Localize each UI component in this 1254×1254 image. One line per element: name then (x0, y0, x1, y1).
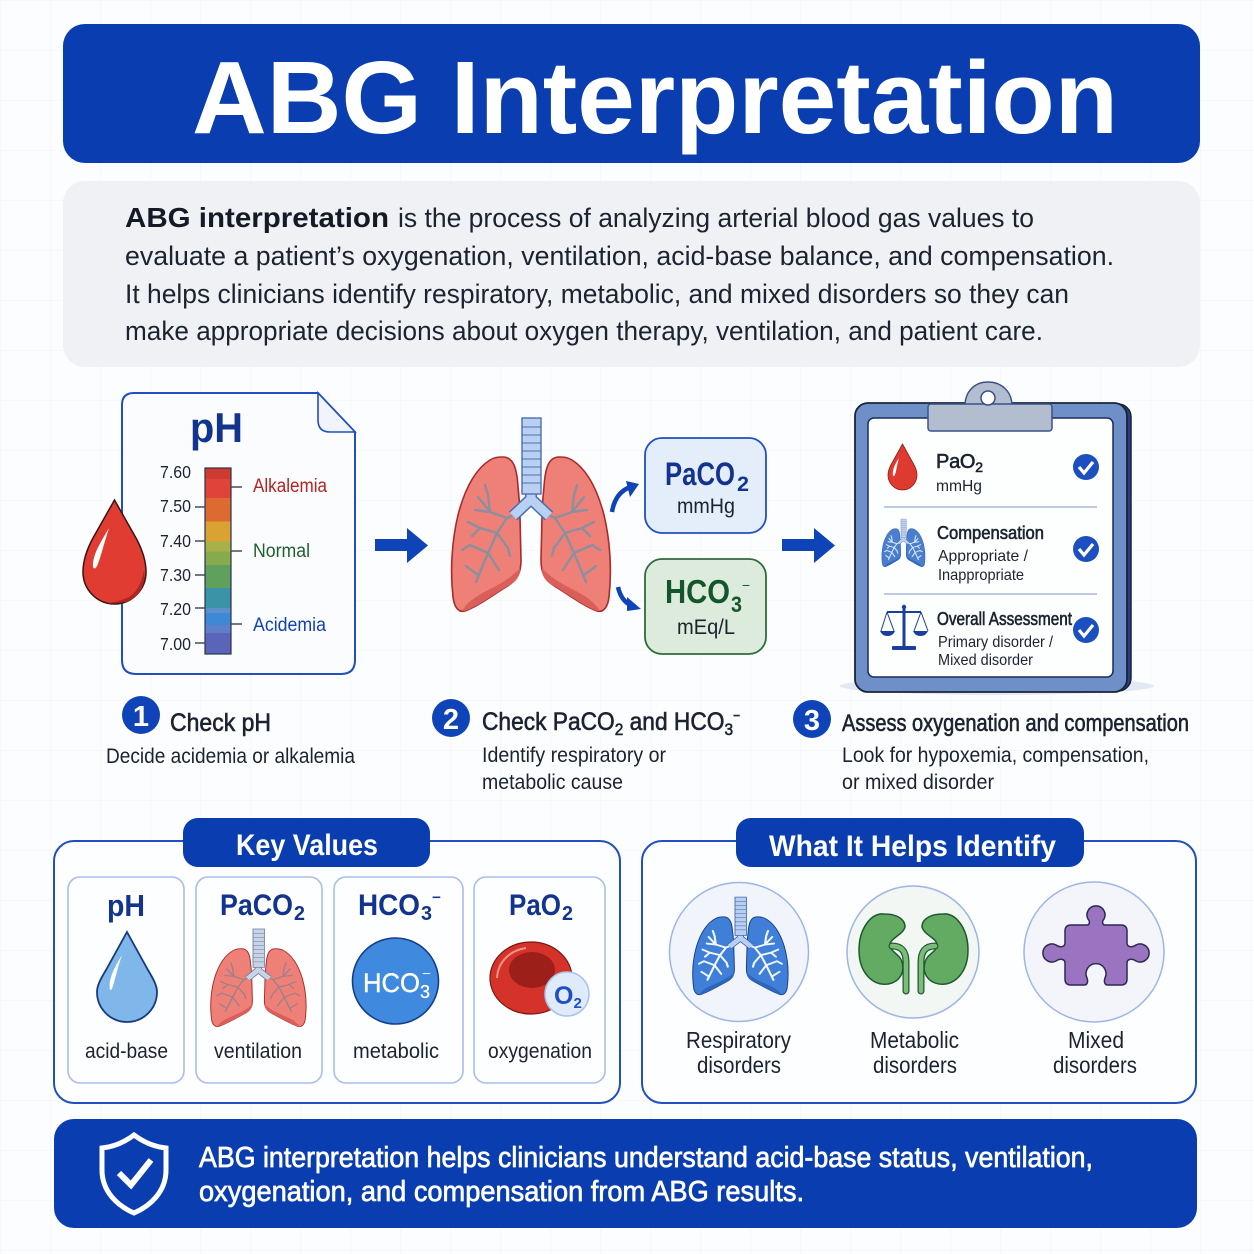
step 2: and HCO (623, 708, 724, 736)
step 3: Assess oxygenation and compensation (842, 710, 1189, 737)
item: mixed disorders: Mixed (1068, 1027, 1124, 1053)
step 2: metabolic cause (482, 771, 623, 794)
card: HCO3: − (422, 966, 431, 981)
card: HCO3: HCO (363, 968, 420, 998)
heading: what it helps identify (736, 818, 1084, 867)
box: HCO3: − (742, 577, 750, 593)
title banner (63, 24, 1200, 163)
row: compensation (937, 523, 1044, 584)
intro text panel: is the process of analyzing arterial blood gas values to (398, 203, 1034, 233)
item: respiratory disorders (670, 882, 808, 1078)
card: PaO2: PaO (509, 889, 561, 922)
arrow: step 2 to step 3 (782, 528, 835, 563)
bottom summary banner: ABG interpretation helps clinicians understand acid-base status, ventilation, (199, 1142, 1093, 1174)
step 1: Check pH (170, 709, 271, 737)
card: PaO2: oxygenation (488, 1040, 592, 1063)
icon: red blood cell: 2 (573, 995, 582, 1012)
title banner: ABG Interpretation (192, 40, 1118, 155)
pH scale numbers: 7.00 (160, 634, 191, 654)
icon: lungs (211, 929, 306, 1027)
intro text panel (63, 181, 1200, 367)
card: PaCO2 (196, 877, 322, 1083)
item: mixed disorders: disorders (1053, 1052, 1137, 1078)
arrow: step 1 to step 2 (375, 528, 428, 563)
card: PaO2: 2 (562, 903, 573, 925)
pH colour bar (195, 468, 242, 654)
card: pH: acid-base (85, 1040, 168, 1063)
pH scale numbers: 7.40 (160, 531, 191, 551)
step 1: 1 (133, 701, 149, 733)
icon: balance scale (880, 605, 928, 650)
pH scale numbers: 7.30 (160, 565, 191, 585)
pH document with scale: Normal (253, 541, 310, 562)
arrow: lungs to HCO3 (618, 587, 641, 611)
card: HCO3: 3 (420, 982, 430, 1002)
step 2: 2 (443, 704, 459, 736)
card: HCO3: 3 (421, 903, 432, 925)
row: PaO2: mmHg (936, 478, 982, 495)
icon: check marks (1073, 454, 1099, 643)
intro text panel: evaluate a patient’s oxygenation, ventilation, acid-base balance, and compensation. (125, 241, 1114, 271)
intro text panel: It helps clinicians identify respiratory, metabolic, and mixed disorders so they can (125, 279, 1069, 309)
row: overall assessment: Primary disorder / (938, 634, 1054, 651)
bottom summary banner: oxygenation, and compensation from ABG results. (199, 1176, 804, 1208)
row: overall assessment (937, 609, 1072, 669)
icon: shield (102, 1135, 166, 1213)
item: respiratory disorders: Respiratory (686, 1027, 791, 1053)
step 3: or mixed disorder (842, 771, 994, 794)
card: PaCO2: PaCO (220, 889, 293, 922)
heading: key values (183, 818, 430, 867)
card: HCO3: − (432, 889, 441, 905)
step 2: Identify respiratory or (482, 744, 666, 767)
box: PaCO2: 2 (737, 473, 749, 496)
item: metabolic disorders (847, 886, 979, 1078)
step 2 (432, 699, 740, 794)
row: PaO2 (936, 451, 983, 495)
card: HCO3 (334, 877, 463, 1083)
card: PaO2 (474, 877, 605, 1083)
pH scale numbers: 7.20 (160, 599, 191, 619)
item: metabolic disorders: Metabolic (870, 1027, 959, 1053)
pH document with scale (122, 393, 355, 674)
step 1: Decide acidemia or alkalemia (106, 745, 355, 768)
row: overall assessment: Overall Assessment (937, 609, 1072, 629)
pH document with scale: pH (190, 404, 243, 451)
pH scale numbers: 7.50 (160, 496, 191, 516)
box: HCO3 (645, 559, 766, 654)
step 3: 3 (804, 705, 820, 737)
box: HCO3: mEq/L (677, 616, 735, 639)
card: PaCO2: 2 (294, 903, 305, 925)
box: PaCO2 (645, 438, 766, 533)
step 1 (106, 696, 355, 768)
arrow: lungs to PaCO2 (612, 481, 639, 512)
box: PaCO2: mmHg (677, 495, 735, 518)
card: PaCO2: ventilation (214, 1040, 302, 1063)
clipboard checklist (840, 382, 1154, 695)
step 3 (793, 700, 1189, 794)
box: HCO3: HCO (665, 573, 730, 610)
row: overall assessment: Mixed disorder (938, 652, 1034, 669)
pH document with scale: Acidemia (253, 615, 326, 636)
bottom summary banner (54, 1119, 1197, 1228)
panel: what it helps identify (642, 818, 1196, 1103)
item: mixed disorders (1024, 882, 1164, 1078)
item: respiratory disorders: disorders (697, 1052, 781, 1078)
box: HCO3: 3 (731, 592, 742, 617)
icon: small blood drop (888, 444, 917, 490)
item: metabolic disorders: disorders (873, 1052, 957, 1078)
intro text panel: ABG interpretation (125, 202, 389, 233)
step 2: − (733, 708, 740, 723)
icon: lungs (452, 418, 610, 611)
row: compensation: Compensation (937, 523, 1044, 543)
heading: what it helps identify: What It Helps Identify (769, 830, 1056, 863)
step 2: Check PaCO (482, 708, 628, 736)
heading: key values: Key Values (236, 829, 378, 862)
card: HCO3: metabolic (353, 1040, 439, 1063)
pH scale numbers (160, 462, 191, 654)
icon: red blood cell: O (554, 982, 573, 1010)
icon: red blood cell (490, 942, 589, 1016)
step 2: 3 (724, 720, 733, 739)
card: pH (68, 877, 184, 1083)
pH scale numbers: 7.60 (160, 462, 191, 482)
icon: blood drop (83, 500, 146, 604)
step 3: Look for hypoxemia, compensation, (842, 744, 1149, 767)
intro text panel: make appropriate decisions about oxygen therapy, ventilation, and patient care. (125, 316, 1043, 346)
icon: small blue lungs (882, 519, 925, 567)
card: pH: pH (107, 888, 145, 923)
box: PaCO2: PaCO (665, 456, 735, 492)
pH document with scale: Alkalemia (253, 476, 327, 497)
row: compensation: Inappropriate (938, 567, 1024, 584)
clip (928, 382, 1052, 431)
step 2: 2 (615, 720, 623, 739)
row: PaO2: 2 (975, 459, 983, 475)
card: HCO3: HCO (358, 889, 420, 922)
row: PaO2: PaO (936, 451, 975, 473)
panel: key values (54, 818, 620, 1103)
row: compensation: Appropriate / (938, 548, 1029, 565)
